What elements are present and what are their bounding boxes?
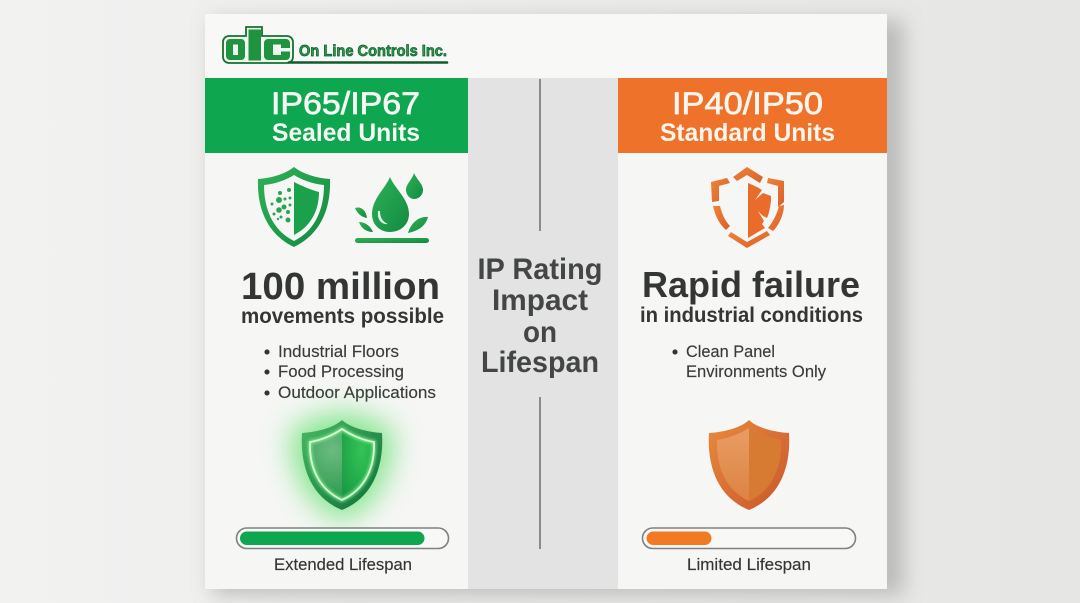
- panel: standard units header: [618, 78, 887, 153]
- card shadow: [212, 20, 904, 595]
- center title: on: [523, 316, 557, 349]
- metric: rapid failure: Rapid failure: [642, 264, 860, 305]
- list: sealed applications: Food Processing: [278, 363, 404, 381]
- heading: IP65/IP67: IP65/IP67: [271, 85, 420, 121]
- label: extended lifespan: Extended Lifespan: [274, 556, 412, 574]
- center title: IP Rating: [478, 253, 602, 286]
- icon: cracked shield: [711, 167, 784, 248]
- logo: On Line Controls Inc.: [223, 27, 447, 63]
- list: sealed applications: Industrial Floors: [278, 343, 399, 361]
- progress bar: extended lifespan: [236, 528, 448, 548]
- list: sealed applications: Outdoor Applications: [278, 384, 436, 402]
- list: standard applications: Environments Only: [686, 363, 827, 381]
- center title: Impact: [492, 284, 588, 317]
- center divider bottom: [539, 397, 541, 549]
- subheading: sealed units: Sealed Units: [272, 119, 420, 147]
- logo: On Line Controls Inc.: On Line Controls Inc.: [299, 43, 447, 60]
- label: movements possible: movements possible: [241, 305, 444, 328]
- card: [205, 14, 887, 589]
- icon: glowing green shield: [292, 412, 392, 520]
- list: sealed applications: [264, 343, 436, 402]
- subheading: standard units: Standard Units: [660, 119, 835, 147]
- icon: orange shield: [709, 420, 789, 510]
- list: standard applications: [672, 343, 827, 381]
- icon: dust shield: [258, 167, 330, 247]
- list: standard applications: Clean Panel: [686, 343, 775, 361]
- label: in industrial conditions: in industrial conditions: [640, 304, 863, 327]
- center title: Lifespan: [481, 346, 599, 379]
- center column: [468, 78, 618, 589]
- metric: 100 million: [241, 266, 444, 328]
- label: limited lifespan: Limited Lifespan: [687, 556, 811, 574]
- progress bar: limited lifespan: [642, 528, 856, 548]
- icon: water drop: [355, 173, 429, 243]
- center divider top: [539, 79, 541, 231]
- metric: 100 million: 100 million: [241, 266, 440, 308]
- heading: IP40/IP50: IP40/IP50: [672, 85, 823, 121]
- center title: [478, 253, 602, 379]
- metric: rapid failure: [640, 264, 863, 327]
- panel: sealed units header: [205, 78, 468, 153]
